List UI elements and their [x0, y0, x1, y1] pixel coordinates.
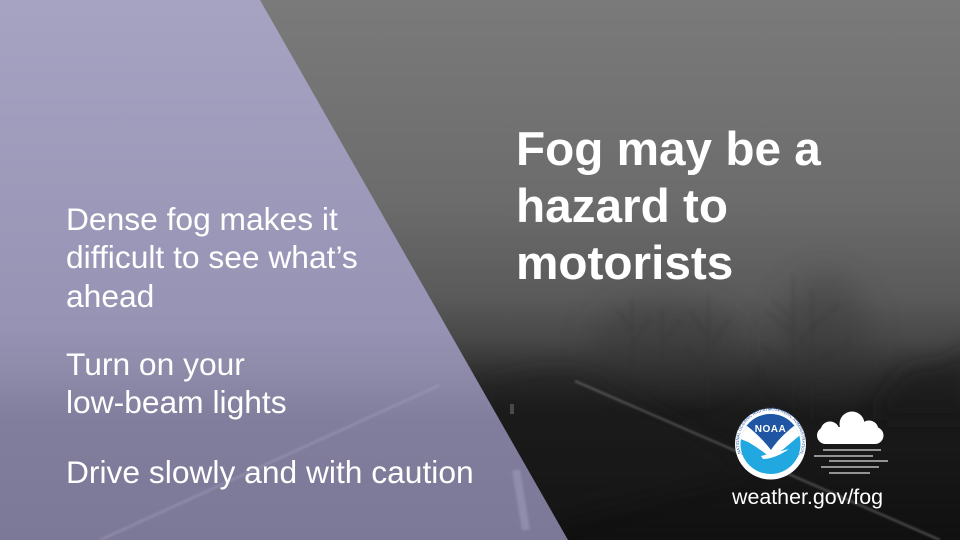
heading: fog hazard: hazard to — [516, 180, 728, 233]
heading: fog hazard: motorists — [516, 237, 733, 290]
text block: low-beam lights: low-beam lights — [66, 384, 287, 420]
icon: NOAA logo — [735, 408, 806, 480]
text block: dense fog: Dense fog makes it — [66, 201, 338, 237]
text block: dense fog — [66, 201, 358, 314]
text block: drive slowly: Drive slowly and with caution — [66, 454, 474, 490]
text block: low-beam lights — [66, 346, 287, 420]
text block: dense fog: difficult to see what’s — [66, 239, 358, 275]
text block: low-beam lights: Turn on your — [66, 346, 245, 382]
icon: fog cloud — [814, 412, 888, 473]
text block: dense fog: ahead — [66, 278, 154, 314]
icon: NOAA logo: NOAA — [755, 424, 786, 435]
heading: fog hazard: Fog may be a — [516, 123, 821, 176]
panel: lavender diagonal overlay — [0, 0, 568, 540]
heading: fog hazard — [516, 123, 821, 290]
icon: NOAA logo: U.S. DEPARTMENT OF COMMERCE — [742, 453, 800, 458]
link text: weather.gov/fog: weather.gov/fog — [731, 485, 883, 509]
icon: NOAA logo: NATIONAL OCEANIC AND ATMOSPHERIC ADMINISTRATION — [736, 408, 805, 454]
